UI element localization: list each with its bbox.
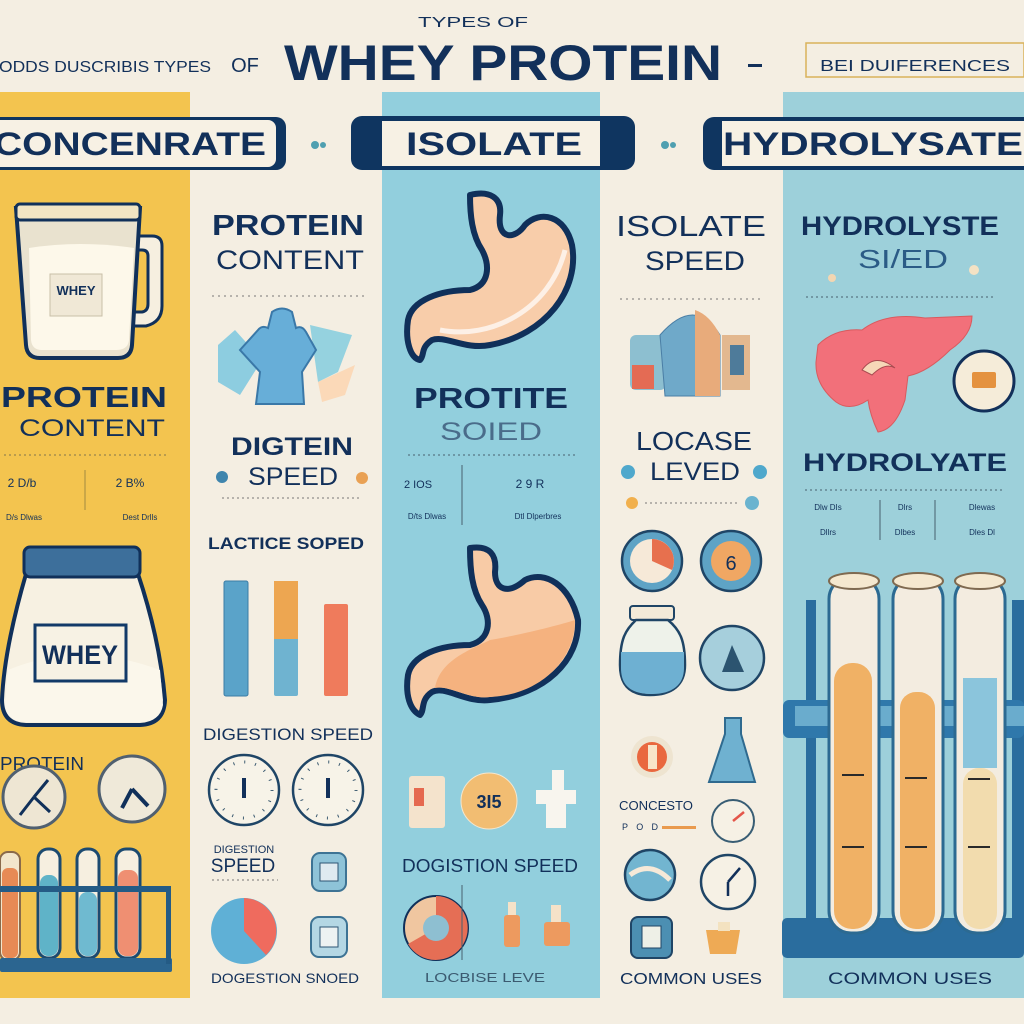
text: protite speed: 2 9 R [516,477,545,491]
text: digestion speed label: DIGESTION SPEED [203,725,373,744]
chart: lactice speed bars: LACTICE SOPED [208,534,364,553]
text: isolate speed: SPEED [645,246,745,276]
icon: whey mug: WHEY [56,283,96,298]
icon: round badge flask [700,626,764,690]
text: protein label: PROTEIN [0,754,84,774]
text: digestion speed column 2 [216,433,368,498]
text: concest: POD [622,822,658,832]
icon: whey tub [2,547,165,725]
text: protein content concentrate: D/s Dlwas [6,513,42,522]
text: protite speed: D/ts Dlwas [408,512,446,521]
icon: round badges isolate speed [622,531,761,591]
text: hydrolyate: Dles Dl [969,528,995,537]
text: protein content column 2: CONTENT [216,245,364,275]
text: hydrolyste speed: SI/ED [858,244,948,274]
text: locbise level: LOCBISE LEVE [425,970,545,985]
icon: small badges column 2 [311,853,347,957]
text: speed column 2: DIGESTION [214,844,274,856]
title: WHEY PROTEIN [284,35,722,91]
icon: body torso column 2 [218,308,355,404]
icon: stomach bottom [407,547,578,715]
panel: header band [0,0,1024,92]
text: concest [619,798,696,832]
icon: gauges concentrate [3,756,165,828]
text: protein content concentrate: 2 D/b [8,476,37,490]
text: concest: CONCESTO [619,798,693,813]
text: digestion speed isolate: DOGISTION SPEED [402,856,578,876]
text: locase level [621,426,767,510]
text: protite speed: Dtl Dlperbres [515,512,561,521]
subtitle left [0,55,259,77]
icon: conical flask [709,718,755,782]
text: protein content concentrate: Dest Drlls [123,513,157,522]
heading: isolate [351,116,635,170]
icon: stomach top [407,194,573,360]
title [284,14,722,91]
text: protite speed: PROTITE [414,383,568,415]
icon: supplement items isolate [409,770,576,829]
text: protein content column 2 [212,210,368,296]
subtitle left: OF [231,55,259,77]
text: protein content column 2: PROTEIN [212,210,364,242]
title: TYPES OF [418,14,528,31]
text: hydrolyate: Dlbes [895,528,915,537]
text: digestion speed column 2: DIGTEIN [231,433,353,461]
subtitle right: BEI DUIFERENCES [820,58,1010,75]
text: locase level: LOCASE [636,426,752,456]
heading: concentrate: CONCENRATE [0,126,266,162]
text: locase level: LEVED [650,458,740,486]
heading: hydrolysate [703,117,1024,170]
icon: supplement items isolate: 3I5 [476,792,502,812]
text: digestion speed footer: DOGESTION SNOED [211,970,359,986]
text: speed column 2 [211,844,278,880]
text: common uses column 4: COMMON USES [620,971,762,988]
icon: whey tub: WHEY [42,640,118,670]
icon: square badges isolate [631,917,740,958]
heading: concentrate [0,117,286,170]
icon: pie chart [211,898,277,964]
text: protein content concentrate [1,382,168,522]
text: protite speed [404,383,578,525]
subtitle right [748,43,1024,77]
text: protein content concentrate: PROTEIN [1,382,167,414]
heading: hydrolysate: HYDROLYSATE [723,126,1023,162]
text: hydrolyate [803,449,1007,540]
text: protite speed: SOIED [440,418,542,446]
text: hydrolyste speed [801,211,999,297]
text: hydrolyate: Dllrs [820,528,836,537]
icon: gauges isolate [625,800,755,909]
text: digestion speed column 2: SPEED [248,463,338,491]
icon: flask jar [620,606,685,695]
text: hydrolyate: Dlw DIs [814,503,842,512]
icon: whey mug [16,204,162,358]
icon: red capsule [631,736,673,778]
heading: isolate: ISOLATE [406,126,582,162]
text: isolate speed: ISOLATE [616,211,766,243]
panel: concentrate column [0,92,190,998]
chart: lactice speed bars [208,534,364,696]
text: protite speed: 2 IOS [404,479,432,491]
text: hydrolyate: Dlrs [898,503,912,512]
icon: round badges isolate speed: 6 [725,553,737,575]
text: protein content concentrate: CONTENT [19,415,165,442]
text: hydrolyste speed: HYDROLYSTE [801,211,999,241]
text: isolate speed [616,211,766,299]
subtitle left: ODDS DUSCRIBIS TYPES [0,59,211,76]
text: hydrolyate: Dlewas [969,503,995,512]
panel: isolate column [382,92,600,998]
icon: test tubes concentrate [0,849,172,972]
icon: test tube rack [782,573,1024,958]
text: hydrolyate: HYDROLYATE [803,449,1007,477]
icon: liver [816,316,1014,432]
icon: clocks column 2 [209,755,363,825]
icon: body torso isolate [630,310,750,396]
panel: hydrolysate column [783,92,1024,998]
icon: small connector dots [311,141,676,149]
text: protein content concentrate: 2 B% [116,476,145,490]
text: speed column 2: SPEED [211,856,275,877]
icon: pie and vials isolate [404,885,570,960]
text: common uses hydrolysate: COMMON USES [828,969,992,988]
